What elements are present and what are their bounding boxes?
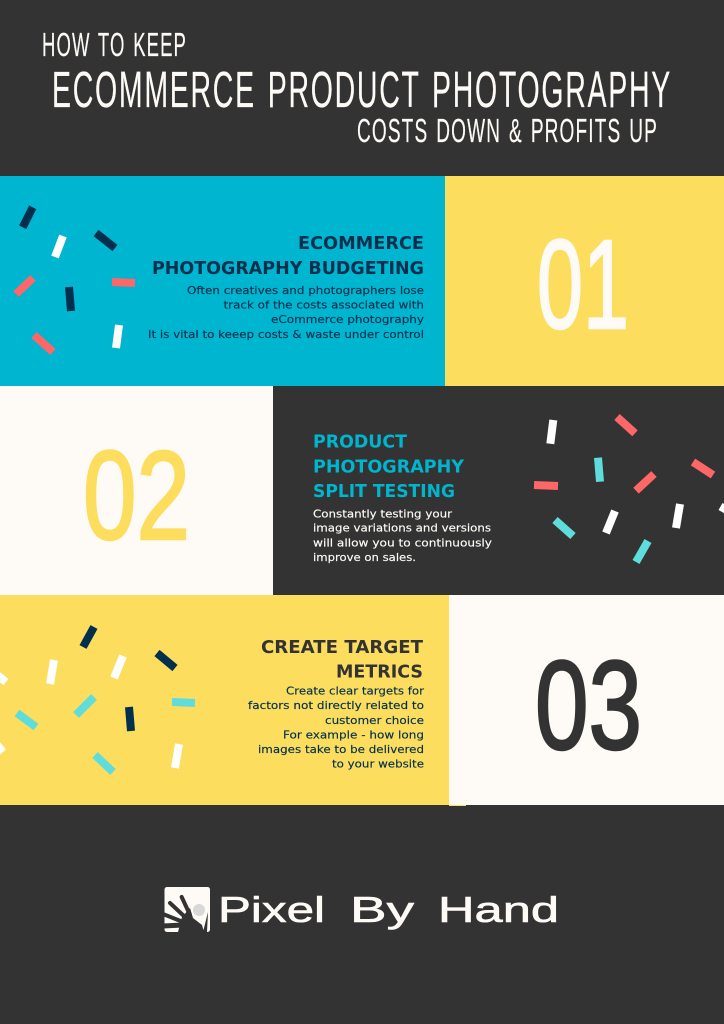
confetti: step 1 bbox=[16, 207, 135, 352]
panel: number 01 bbox=[445, 176, 724, 386]
text block: step 1: eCommerce photography bbox=[271, 313, 425, 326]
logo bbox=[163, 887, 559, 932]
panel: step 1 budgeting bbox=[0, 176, 445, 386]
text block: step 3: Create clear targets for bbox=[286, 684, 425, 698]
title: HOW TO KEEP bbox=[42, 27, 187, 64]
heading: step 1 bbox=[152, 234, 424, 279]
text block: step 1: It is vital to keeep costs & waste under control bbox=[148, 328, 424, 341]
text block: step 2: improve on sales. bbox=[313, 551, 416, 564]
heading: step 2: SPLIT TESTING bbox=[313, 482, 455, 502]
text block: step 2: image variations and versions bbox=[313, 522, 491, 534]
wordmark: Hand bbox=[438, 889, 559, 930]
panel: number 01: 01 bbox=[537, 214, 629, 355]
text block: step 3: to your website bbox=[332, 758, 424, 770]
heading: step 3: METRICS bbox=[336, 662, 423, 682]
panel: number 02 bbox=[0, 386, 273, 595]
text block: step 2 bbox=[313, 508, 493, 564]
text block: step 3 bbox=[248, 684, 425, 770]
wordmark: Pixel bbox=[218, 889, 325, 930]
wordmark bbox=[218, 889, 559, 930]
text block: step 3: customer choice bbox=[325, 714, 424, 727]
text block: step 3: images take to be delivered bbox=[258, 743, 424, 756]
icon: hand on photo bbox=[163, 887, 210, 932]
panel: step 3 target metrics bbox=[0, 595, 449, 805]
text block: step 1: track of the costs associated with bbox=[224, 298, 424, 312]
heading: step 3 bbox=[261, 638, 423, 682]
heading: step 2 bbox=[313, 432, 464, 502]
confetti: step 3 bbox=[0, 627, 195, 772]
panel: number 03 bbox=[449, 595, 724, 805]
panel: number 03: 03 bbox=[535, 635, 642, 776]
text block: step 3: factors not directly related to bbox=[248, 699, 424, 712]
text block: step 1: Often creatives and photographers lose bbox=[187, 284, 424, 297]
text block: step 1 bbox=[148, 284, 425, 341]
text block: step 2: Constantly testing your bbox=[313, 508, 453, 520]
heading: step 1: PHOTOGRAPHY BUDGETING bbox=[152, 259, 424, 279]
heading: step 1: ECOMMERCE bbox=[298, 234, 424, 254]
title bbox=[42, 27, 672, 150]
confetti: step 2 bbox=[534, 417, 724, 562]
heading: step 2: PHOTOGRAPHY bbox=[313, 458, 464, 478]
panel: number 02: 02 bbox=[83, 425, 190, 566]
heading: step 2: PRODUCT bbox=[313, 432, 407, 452]
heading: step 3: CREATE TARGET bbox=[261, 638, 423, 658]
panel: step 2 split testing bbox=[273, 386, 724, 595]
text block: step 3: For example - how long bbox=[283, 728, 424, 742]
text block: step 2: will allow you to continuously bbox=[313, 536, 493, 550]
wordmark: By bbox=[350, 889, 414, 930]
